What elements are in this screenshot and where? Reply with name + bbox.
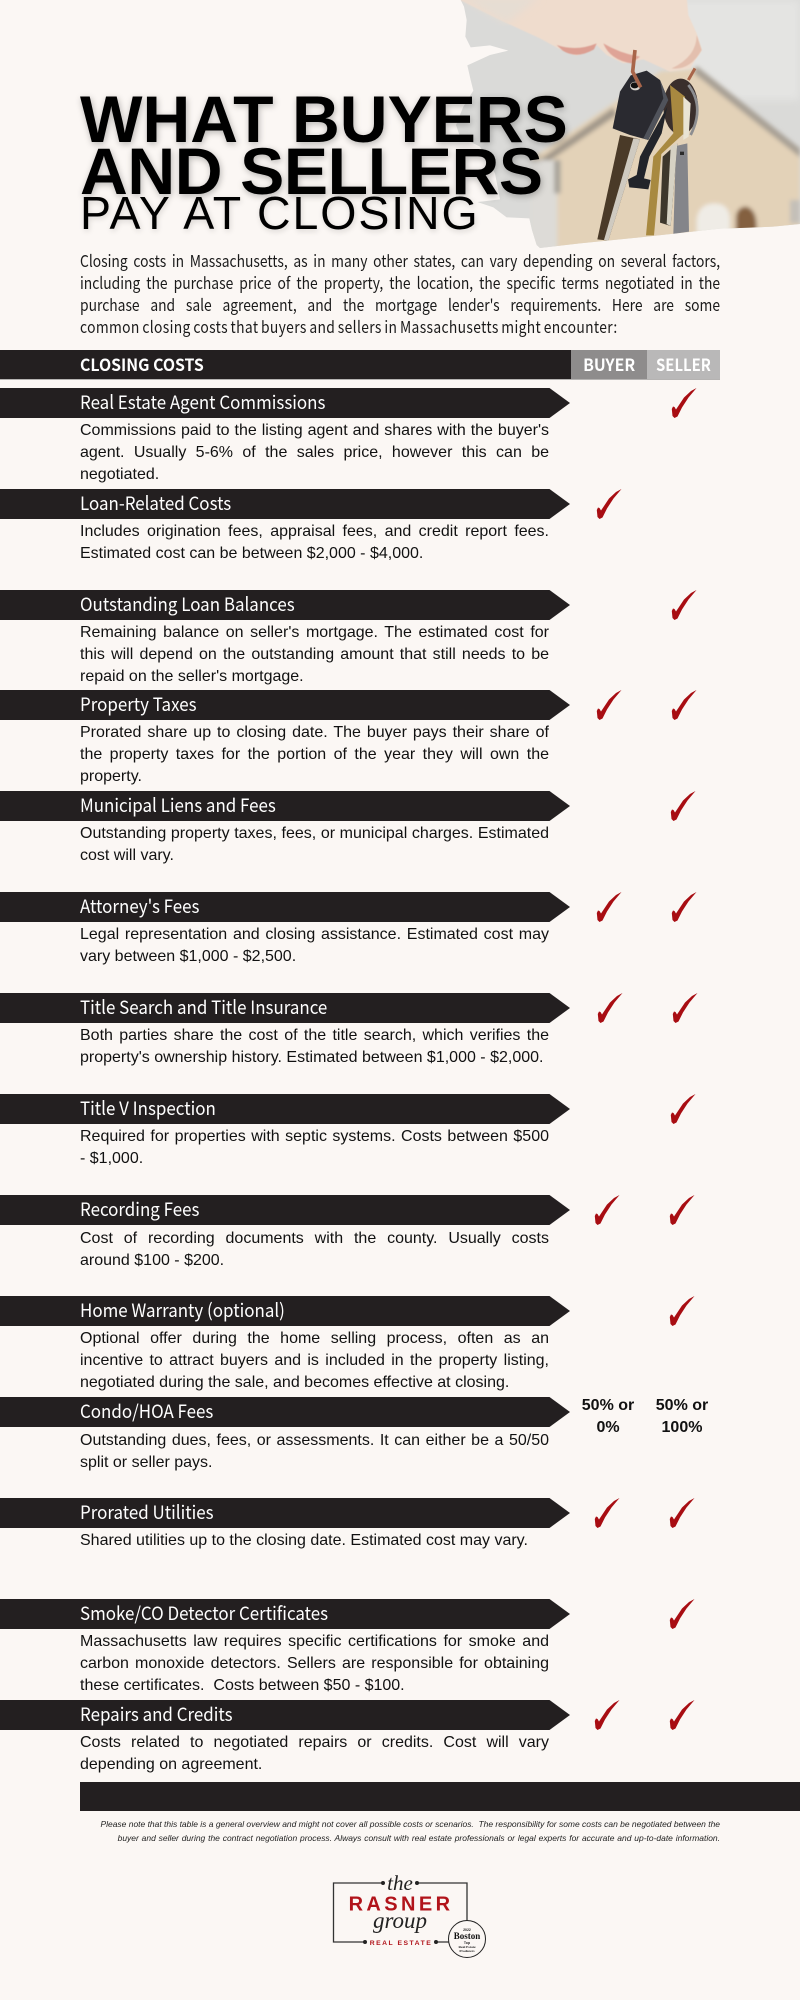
row: Attorney's Fees: Attorney's Fees (80, 893, 199, 919)
row: Recording Fees: Cost of recording documents with the county. Usually costs around $100 - $200. (80, 1230, 549, 1269)
logo wording (349, 1871, 453, 1947)
logo: the Rasner group real estate (332, 1871, 486, 1958)
Boston badge: 2022 (463, 1928, 471, 1932)
round key head (663, 79, 698, 135)
intro paragraph: including the purchase price of the property, the location, the specific terms negotiated in the (80, 270, 720, 294)
row: Condo/HOA Fees: 50% or (582, 1397, 634, 1414)
disclaimer note: Please note that this table is a general overview and might not cover all possible costs or scenarios. The responsibility for some costs can be negotiated between the (100, 1819, 720, 1829)
row: Prorated Utilities: Prorated Utilities (80, 1499, 214, 1525)
row: Title Search and Title Insurance (0, 993, 698, 1066)
row: Municipal Liens and Fees: Outstanding property taxes, fees, or municipal charges. Estimated cost will vary. (80, 825, 549, 864)
row: Smoke/CO Detector Certificates: Smoke/CO Detector Certificates (80, 1600, 328, 1626)
row: Condo/HOA Fees (0, 1397, 708, 1471)
row: Outstanding Loan Balances (0, 590, 696, 685)
key ring (633, 50, 641, 87)
row: Title Search and Title Insurance: Both parties share the cost of the title search, which verifies the property's ownership history. Estimated between $1,000 - $2,000. (80, 1027, 549, 1066)
black key (628, 107, 667, 189)
row: Loan-Related Costs: Loan-Related Costs (80, 490, 231, 516)
logo wording: RASNER (349, 1894, 453, 1916)
title (78, 82, 570, 239)
row: Condo/HOA Fees: Outstanding dues, fees, or assessments. It can either be a 50/50 split or seller pays. (80, 1432, 549, 1471)
brass key (646, 85, 685, 235)
hand (453, 0, 702, 72)
row: Recording Fees: Recording Fees (80, 1196, 199, 1222)
row: Real Estate Agent Commissions: Commissions paid to the listing agent and shares with the buyer's agent. Usually 5-6% of the sales price, however this can be negotiated. (80, 422, 549, 483)
intro paragraph: purchase and sale agreement, and the mortgage lender's requirements. Here are some (80, 292, 720, 316)
row: Home Warranty (optional): Optional offer during the home selling process, often as an incentive to attract buyers and is included in the property listing, negotiated during the sale, and becomes effective at closing. (80, 1330, 549, 1391)
table header (0, 350, 720, 380)
row: Attorney's Fees: Legal representation and closing assistance. Estimated cost may vary between $1,000 - $2,500. (80, 926, 549, 965)
row: Property Taxes: Property Taxes (80, 691, 197, 717)
house (530, 66, 800, 260)
row: Outstanding Loan Balances: Remaining balance on seller's mortgage. The estimated cost for this will depend on the outstanding amount that still needs to be repaid on the seller's mortgage. (80, 624, 549, 685)
footer bar (80, 1782, 800, 1811)
row: Home Warranty (optional) (0, 1296, 694, 1391)
row: Attorney's Fees (0, 892, 696, 965)
middle key (660, 143, 677, 226)
row: Prorated Utilities (0, 1498, 694, 1549)
row: Title V Inspection: Title V Inspection (80, 1095, 216, 1121)
Boston badge: Real Estate (458, 1945, 476, 1949)
logo wording: REAL ESTATE (370, 1940, 432, 1947)
row: Loan-Related Costs (0, 489, 622, 562)
disclaimer note (100, 1819, 720, 1842)
background wall (440, 0, 800, 260)
black key fob (613, 71, 668, 140)
silver key (673, 143, 689, 234)
first key blade (597, 135, 640, 241)
row: Municipal Liens and Fees (0, 791, 696, 864)
row: Municipal Liens and Fees: Municipal Liens and Fees (80, 792, 276, 818)
header: closing costs: CLOSING COSTS (80, 352, 204, 376)
row: Real Estate Agent Commissions (0, 388, 696, 483)
row: Condo/HOA Fees: 100% (662, 1419, 702, 1436)
logo wording: group (373, 1908, 427, 1933)
title: AND SELLERS (80, 135, 543, 209)
row: Smoke/CO Detector Certificates (0, 1599, 694, 1694)
intro paragraph (80, 248, 720, 338)
title: PAY AT CLOSING (80, 187, 480, 239)
row: Title Search and Title Insurance: Title Search and Title Insurance (80, 994, 327, 1020)
title: WHAT BUYERS (80, 82, 568, 156)
intro paragraph: Closing costs in Massachusetts, as in many other states, can vary depending on several factors, (80, 248, 720, 272)
logo wording: the (387, 1871, 413, 1895)
row: Property Taxes: Prorated share up to closing date. The buyer pays their share of the property taxes for the portion of the year they will own the property. (80, 724, 549, 785)
row: Property Taxes (0, 690, 696, 785)
row: Outstanding Loan Balances: Outstanding Loan Balances (80, 591, 295, 617)
logo frame (334, 1881, 467, 1944)
row: Smoke/CO Detector Certificates: Massachusetts law requires specific certifications for smoke and carbon monoxide detectors. Sellers are responsible for obtaining these certificates. Costs between $50 - $100. (80, 1633, 549, 1694)
row: Title V Inspection: Required for properties with septic systems. Costs between $500 - $1,000. (80, 1128, 549, 1167)
row: Loan-Related Costs: Includes origination fees, appraisal fees, and credit report fees. Estimated cost can be between $2,000 - $4,000. (80, 523, 549, 562)
row: Repairs and Credits (0, 1700, 694, 1773)
Boston badge: Producers (459, 1949, 475, 1953)
row: Repairs and Credits: Repairs and Credits (80, 1701, 233, 1727)
Boston badge: Top (464, 1941, 470, 1945)
header: buyer (571, 350, 647, 379)
header: seller: SELLER (656, 352, 711, 376)
hero photo: hand holding house keys (456, 0, 800, 248)
row: Home Warranty (optional): Home Warranty (optional) (80, 1297, 285, 1323)
row: Recording Fees (0, 1195, 694, 1269)
row: Title V Inspection (0, 1094, 696, 1167)
header: buyer: BUYER (583, 352, 635, 376)
row: Prorated Utilities: Shared utilities up to the closing date. Estimated cost may vary. (80, 1532, 528, 1549)
row: Repairs and Credits: Costs related to negotiated repairs or credits. Cost will vary depending on agreement. (80, 1734, 549, 1773)
row: Real Estate Agent Commissions: Real Estate Agent Commissions (80, 389, 325, 415)
row: Condo/HOA Fees: Condo/HOA Fees (80, 1398, 213, 1424)
row: Condo/HOA Fees: 0% (596, 1419, 620, 1436)
Boston badge: Boston (454, 1931, 480, 1941)
disclaimer note: buyer and seller during the contract negotiation process. Always consult with real estate professionals or legal experts for accurate and up-to-date information. (118, 1832, 720, 1842)
intro paragraph: common closing costs that buyers and sellers in Massachusetts might encounter: (80, 314, 618, 338)
row: Condo/HOA Fees: 50% or (656, 1397, 708, 1414)
Boston badge (448, 1920, 486, 1958)
header: seller (647, 350, 720, 379)
